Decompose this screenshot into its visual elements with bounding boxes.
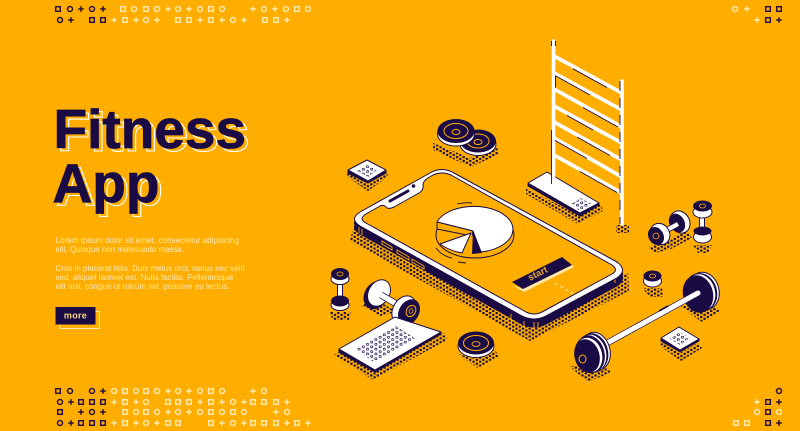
body text xyxy=(56,235,245,291)
barbell xyxy=(569,269,723,382)
ladder shadow xyxy=(526,188,603,224)
floor plate xyxy=(455,332,499,368)
phone side buttons xyxy=(359,227,615,329)
left plates xyxy=(571,329,614,376)
phone screen xyxy=(362,173,616,314)
bottom left glyph pattern xyxy=(56,388,311,426)
top right glyph pattern xyxy=(732,6,782,23)
ladder base xyxy=(528,172,599,216)
paper tile xyxy=(334,317,447,380)
top weight xyxy=(331,268,349,284)
small tile top left xyxy=(346,160,389,191)
back plate xyxy=(359,276,395,314)
body text: elit nisi, congue ut rutrum vel, posuere eu lectus. xyxy=(56,281,230,291)
ladder rungs xyxy=(554,56,622,193)
more button xyxy=(56,307,100,328)
pie detached slice xyxy=(440,233,471,253)
right plates xyxy=(679,269,723,316)
pie main slice xyxy=(437,206,513,252)
title text: Fitness xyxy=(54,98,246,160)
bottom right glyph pattern xyxy=(734,388,782,426)
start dashed line xyxy=(555,283,576,295)
pie base xyxy=(436,212,514,258)
title shadow: App xyxy=(56,155,163,217)
phone camera xyxy=(412,184,415,188)
phone shadow xyxy=(350,226,629,341)
body text: Cras in placerat felis. Duis metus orci, varius nec velit xyxy=(56,263,245,273)
phone side xyxy=(354,216,622,327)
title text: App xyxy=(52,152,159,214)
large dumbbell xyxy=(359,276,424,329)
pie accent arcs xyxy=(436,203,472,263)
bottom weight xyxy=(331,296,349,310)
front plate xyxy=(387,292,424,329)
body text: sed, aliquet laoreet est. Nulla facilisi. Pellentesque xyxy=(56,272,234,282)
front plate xyxy=(438,119,474,146)
left small dumbbell xyxy=(329,268,351,320)
far plate xyxy=(666,207,694,237)
phone speaker xyxy=(390,191,408,201)
handle xyxy=(381,295,405,309)
pie dark wedge xyxy=(472,231,482,254)
pie cut wall xyxy=(437,222,473,236)
right vertical dumbbell xyxy=(693,200,712,253)
ladder left pole xyxy=(552,41,556,184)
title shadow: Fitness xyxy=(57,101,250,163)
body text: Lorem ipsum dolor sit amet, consectetur adipiscing xyxy=(56,235,239,245)
bottom weight xyxy=(694,231,712,243)
phone frame xyxy=(354,170,622,319)
ladder with base xyxy=(526,41,629,233)
start button xyxy=(512,257,574,292)
pie chart xyxy=(436,203,514,263)
small tile bottom right xyxy=(660,327,702,361)
body text: elit. Quisque non malesuada massa. xyxy=(56,244,184,254)
barbell shadows xyxy=(680,304,720,322)
near plate xyxy=(646,220,674,248)
phone xyxy=(350,170,629,341)
top weight xyxy=(693,206,712,218)
top left glyph pattern xyxy=(56,6,311,23)
back plate xyxy=(460,130,496,156)
more button: more xyxy=(64,310,87,320)
title xyxy=(52,98,250,217)
ladder right pole xyxy=(620,81,622,224)
right horizontal dumbbell xyxy=(645,207,694,253)
small weight xyxy=(642,270,663,297)
start button: start xyxy=(526,264,550,284)
barbell bar xyxy=(600,293,698,347)
weight plates pair xyxy=(433,119,499,167)
title shadow xyxy=(56,101,250,217)
title text xyxy=(52,98,246,214)
